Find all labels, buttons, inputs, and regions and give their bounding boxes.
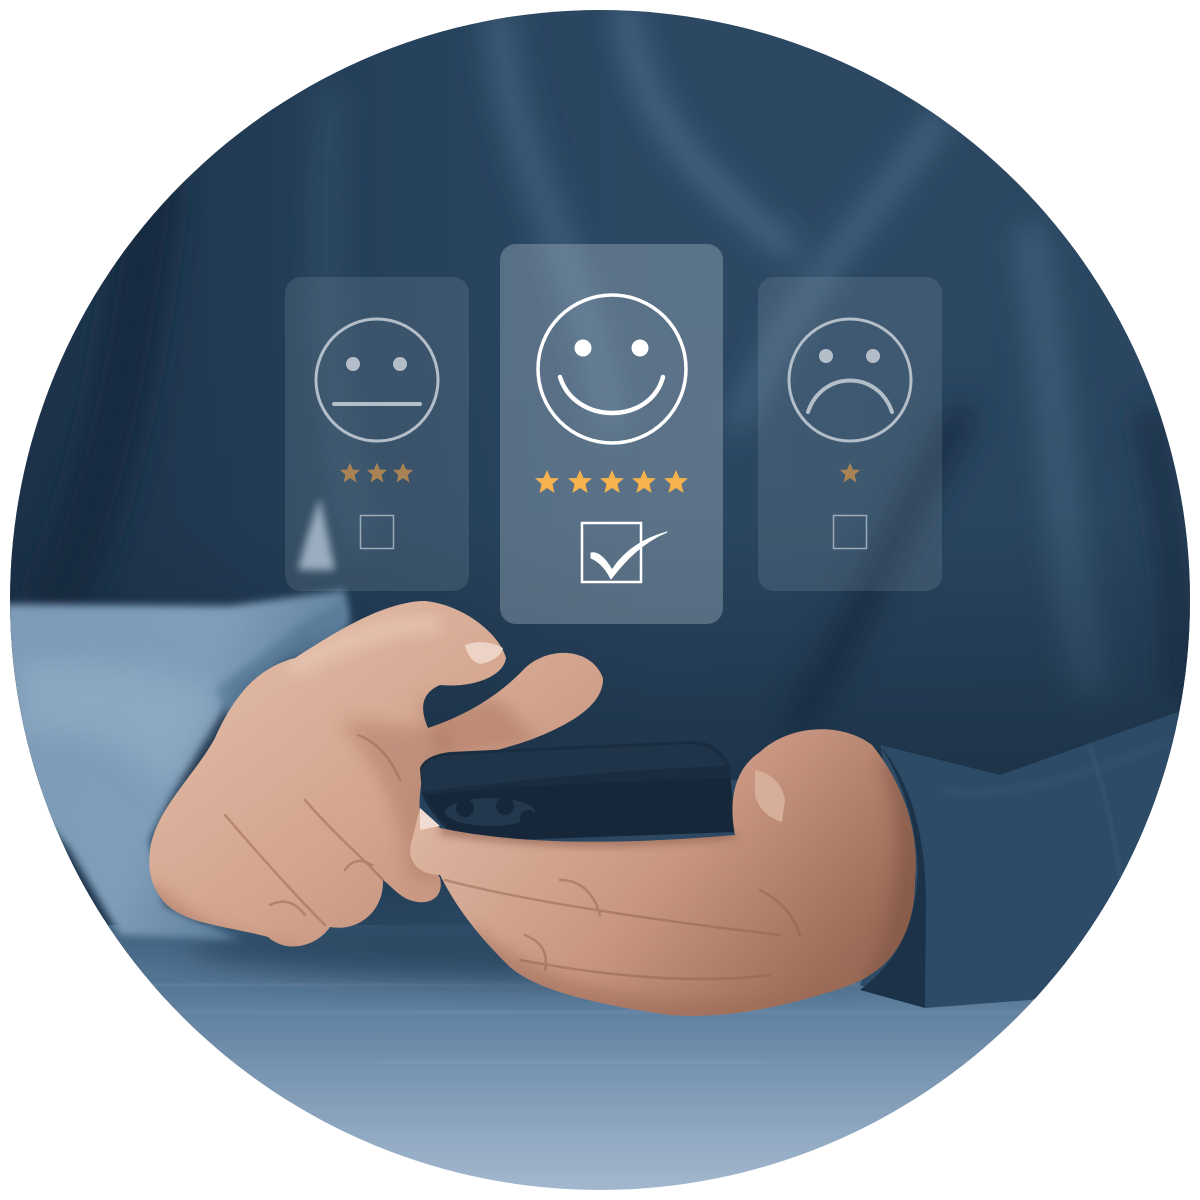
panel: happy rating card: [500, 244, 723, 624]
panel: sad rating card: [758, 277, 942, 591]
sweater lower shadow: [10, 560, 1190, 780]
icon: sad face: [789, 319, 911, 441]
table: [108, 925, 1092, 1190]
checkbox: [834, 516, 866, 548]
one star: [840, 463, 860, 482]
three stars: [340, 463, 413, 482]
checkbox with tick: [582, 523, 667, 582]
icon: neutral face: [316, 319, 438, 441]
right sleeve cuff: [860, 712, 1200, 1008]
five stars: [535, 470, 688, 493]
sweater folds: [60, 10, 1180, 720]
icon: pointing hand: [149, 601, 603, 946]
phone: [420, 741, 736, 842]
dark shadow on table under hands: [191, 925, 862, 995]
white reflection behind card: [298, 498, 335, 570]
icon: smiling face: [538, 295, 686, 443]
panel: neutral rating card: [285, 277, 469, 591]
icon: holding hand: [410, 729, 916, 1016]
checkbox: [360, 516, 394, 548]
left sleeve: [0, 590, 350, 940]
